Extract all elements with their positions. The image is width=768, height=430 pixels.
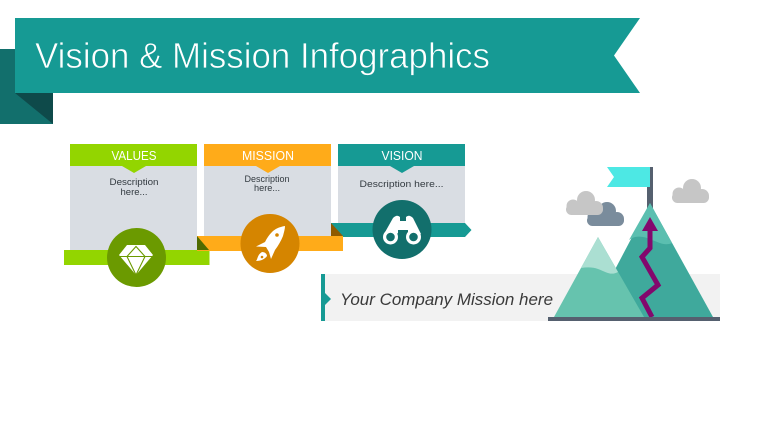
icon: diamond (119, 245, 153, 275)
arrow (642, 217, 658, 317)
small mountain (554, 237, 644, 317)
icon: binoculars (383, 216, 421, 244)
panel: values: Description (110, 177, 158, 187)
panel: mission: here... (254, 183, 280, 193)
panel: values (64, 144, 210, 287)
icon: rocket (256, 226, 285, 261)
panel: vision (331, 144, 472, 259)
callout: company mission (321, 274, 720, 321)
panel: mission: Description (244, 174, 290, 184)
panel: mission: MISSION (242, 149, 294, 163)
title: Vision & Mission Infographics (35, 35, 490, 76)
base line (548, 317, 720, 321)
panel: values: VALUES (112, 149, 156, 163)
big mountain (590, 203, 713, 317)
flag (607, 167, 653, 209)
panel: values: here... (120, 187, 148, 197)
callout: company mission: Your Company Mission here (340, 291, 553, 309)
panel: vision: Description here... (360, 179, 444, 190)
icon: mountain with flag (548, 167, 720, 321)
title banner (0, 18, 640, 124)
panel: mission (197, 144, 343, 273)
panel: vision: VISION (382, 149, 422, 163)
clouds (566, 179, 709, 226)
